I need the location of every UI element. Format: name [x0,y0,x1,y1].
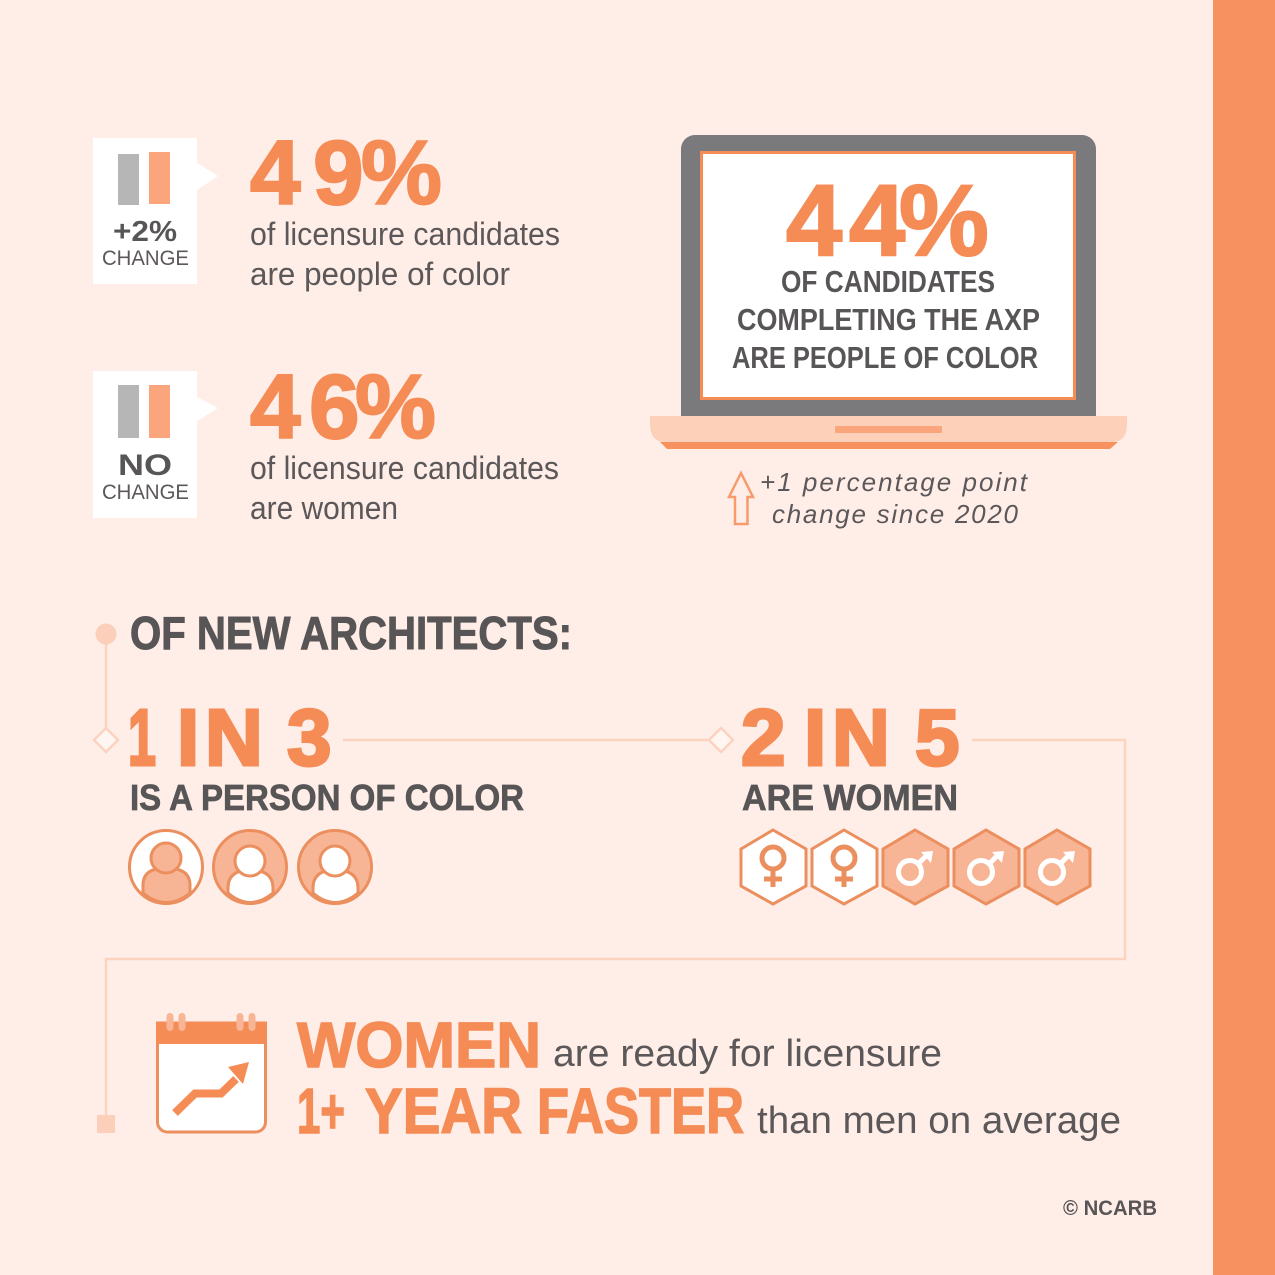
icon: calendar with rising arrow [156,1013,267,1132]
46% figure: 46% [250,357,436,458]
icon: male [883,830,948,904]
icon row: people [130,830,372,904]
copyright: © NCARB [1063,1197,1157,1220]
laptop illustration [650,135,1127,449]
1 in 3 figure: IN [177,693,263,782]
laptop caption: COMPLETING THE AXP [737,302,1040,337]
laptop caption [732,264,1040,375]
change badge: no change: NO [118,449,172,482]
2 in 5 figure: 2 IN 5 [741,693,960,782]
laptop caption: ARE PEOPLE OF COLOR [732,340,1038,375]
change badge: +2%: +2% [113,216,177,248]
icon: female [812,830,877,904]
panel: women stat [93,357,559,526]
panel: 1 in 3 [94,693,524,904]
1 in 3 figure [128,693,332,782]
statement text: WOMEN [297,1009,541,1081]
laptop caption: OF CANDIDATES [781,264,995,299]
change note: +1 percentage point [760,467,1029,497]
caption: IS A PERSON OF COLOR [130,777,524,818]
statement text: than men on average [757,1100,1121,1142]
1 in 3 figure: 1 [128,693,156,782]
icon: highlighted person [130,830,202,904]
diamond marker [709,728,733,752]
icon: male [954,830,1019,904]
description: of licensure candidates [250,450,559,486]
diamond marker [94,728,118,752]
change badge: +2% [93,138,218,284]
statement text: FASTER [537,1075,744,1147]
icon: female [741,830,806,904]
statement text: 1+ [297,1075,345,1147]
connector lines [106,634,1125,1116]
caption: ARE WOMEN [742,777,958,818]
description [250,216,560,292]
statement text: are ready for licensure [553,1033,942,1075]
icon: male [1025,830,1090,904]
change badge: +2%: CHANGE [102,247,189,270]
timeline start dot [96,624,116,644]
icon: up arrow [729,473,753,524]
right orange stripe [1213,0,1275,1275]
panel: people of color stat [93,123,560,292]
statement text [297,1009,1121,1147]
change note: change since 2020 [772,499,1019,529]
icon row: gender hexagons [741,830,1090,904]
49% figure: 49% [250,123,442,224]
icon: person [298,830,372,904]
panel: laptop AXP stat [650,135,1127,529]
timeline end square [97,1115,115,1133]
description: are women [250,490,398,526]
1 in 3 figure: 3 [287,693,332,782]
heading: of new architects: OF NEW ARCHITECTS: [130,607,572,659]
description [250,450,559,526]
statement text: YEAR [365,1075,522,1147]
44% figure: 44% [786,165,989,277]
panel: women faster [156,1009,1121,1147]
description: of licensure candidates [250,216,560,252]
change badge: no change [93,371,218,518]
icon: person [214,830,286,904]
description: are people of color [250,256,510,292]
panel: 2 in 5 [709,693,1090,904]
change note [760,467,1029,529]
change badge: no change: CHANGE [102,481,189,504]
